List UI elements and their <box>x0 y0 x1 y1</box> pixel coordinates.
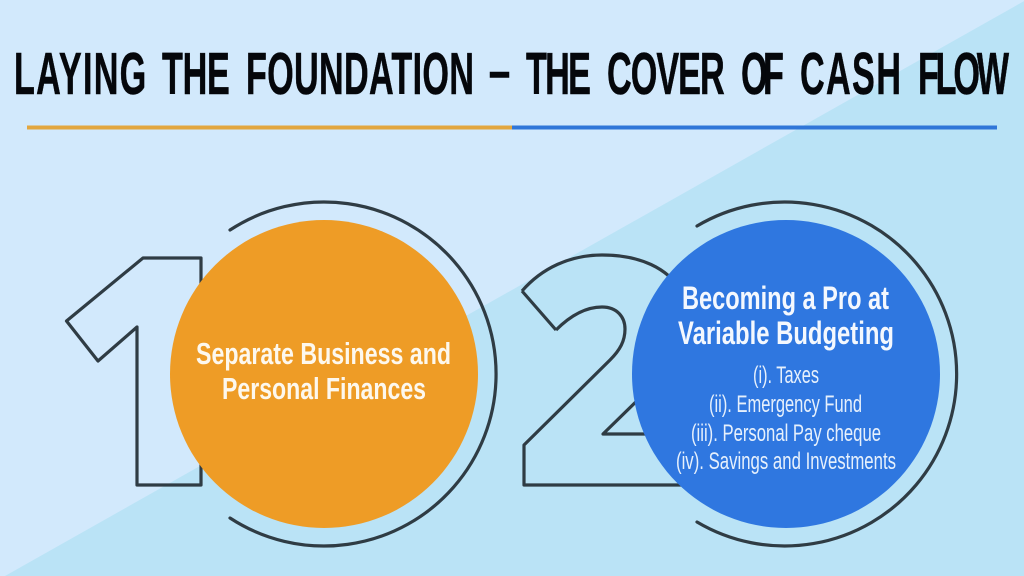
title: THE <box>526 41 591 107</box>
step 2 list: (iv). Savings and Investments <box>676 448 896 475</box>
title: LAYING <box>14 41 146 107</box>
panel: step 1 <box>66 202 496 546</box>
step 2 heading: Becoming a Pro at <box>682 280 889 316</box>
step 2 list: (iii). Personal Pay cheque <box>691 420 881 447</box>
title underline <box>27 126 997 130</box>
step 2 list <box>676 362 896 475</box>
title: THE <box>162 41 230 107</box>
step 2 heading <box>678 280 894 351</box>
step 1 text: Separate Business and <box>196 336 451 371</box>
title: FOUNDATION <box>246 41 474 107</box>
panel: step 2 <box>522 202 957 546</box>
step 2 list: (ii). Emergency Fund <box>709 391 862 418</box>
title: OF <box>741 41 784 107</box>
blue circle <box>632 220 940 528</box>
ring arc 2 <box>697 202 957 546</box>
number 1 outline <box>66 258 201 485</box>
title: COVER <box>607 41 725 107</box>
step 1 text <box>196 336 451 406</box>
title: CASH <box>800 41 901 107</box>
title: FLOW <box>918 41 1009 107</box>
orange circle <box>170 220 478 528</box>
number 2 outline <box>522 255 690 485</box>
step 2 list: (i). Taxes <box>753 362 819 389</box>
ring arc 1 <box>230 202 496 546</box>
step 1 text: Personal Finances <box>222 371 426 406</box>
title <box>14 41 1009 107</box>
step 2 heading: Variable Budgeting <box>678 315 894 351</box>
